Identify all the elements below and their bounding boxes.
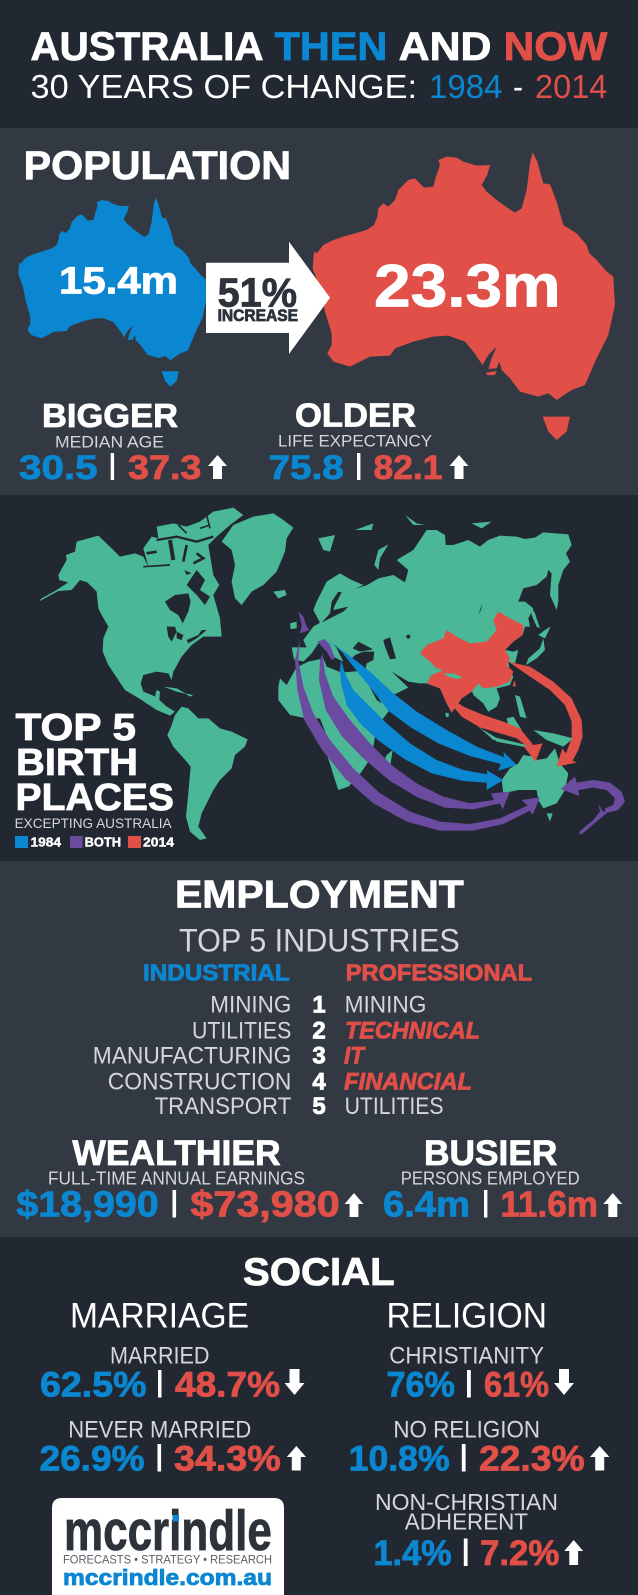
stat: bigger median age: 30.5 <box>19 449 98 487</box>
panel: social <box>40 1251 609 1595</box>
column headings: PROFESSIONAL <box>346 960 532 986</box>
column: religion: NO RELIGION <box>393 1416 540 1443</box>
stat: bigger median age: 37.3 <box>128 449 201 487</box>
column: religion: 7.2% <box>480 1534 559 1573</box>
stat: busier employed <box>383 1134 622 1224</box>
column: religion: 1.4% <box>374 1534 452 1573</box>
arrow: purple both inner <box>319 653 510 809</box>
column: religion: RELIGION <box>386 1297 547 1336</box>
stat: older life expectancy: 82.1 <box>374 449 442 487</box>
arrow: red china <box>508 662 583 767</box>
map: new zealand <box>579 803 607 835</box>
logo: mccrindle: mccrindle.com.au <box>63 1565 272 1590</box>
panel: employment <box>16 873 622 1224</box>
title: NOW <box>504 25 608 69</box>
subtitle: - <box>513 69 523 106</box>
stat: bigger median age: BIGGER <box>42 398 178 435</box>
column: marriage: NEVER MARRIED <box>68 1416 251 1443</box>
table: industries: 5 <box>312 1093 326 1120</box>
table: industries: 2 <box>312 1017 326 1044</box>
table: industries: TECHNICAL <box>345 1017 480 1044</box>
legend <box>15 836 174 850</box>
arrow: purple both outer <box>295 640 540 831</box>
heading: social: SOCIAL <box>243 1251 395 1294</box>
heading: top 5 birth places: BIRTH <box>16 742 138 784</box>
heading: top 5 birth places: EXCEPTING AUSTRALIA <box>15 815 172 831</box>
map: north america and greenland <box>40 508 293 716</box>
subtitle: 30 YEARS OF CHANGE: <box>30 69 417 106</box>
stat: bigger median age: MEDIAN AGE <box>55 432 164 452</box>
stat: wealthier earnings: $73,980 <box>190 1184 340 1224</box>
table: industries: MINING <box>210 991 291 1018</box>
column: religion: CHRISTIANITY <box>389 1342 544 1369</box>
map: south america <box>167 707 248 840</box>
panel: world map birth places <box>15 508 625 850</box>
legend: 1984 <box>30 836 61 850</box>
stat: busier employed: 6.4m <box>383 1184 470 1224</box>
title: THEN <box>275 25 387 69</box>
logo: mccrindle: mccrindle <box>64 1499 272 1563</box>
column: religion: 10.8% <box>349 1440 450 1479</box>
table: industries: 4 <box>312 1068 326 1095</box>
stat: wealthier earnings <box>16 1134 363 1224</box>
arrow: red india <box>450 697 543 762</box>
table: industries: CONSTRUCTION <box>108 1068 291 1095</box>
logo: mccrindle: FORECASTS • STRATEGY • RESEARCH <box>63 1554 272 1566</box>
legend: 2014 <box>143 836 174 850</box>
stat: older life expectancy: 75.8 <box>268 449 344 487</box>
column headings <box>143 960 532 986</box>
subtitle: 1984 <box>429 69 502 106</box>
column: religion: NON-CHRISTIAN <box>375 1489 558 1515</box>
table: industries: MINING <box>345 991 426 1018</box>
arrow: 51% increase: 51% <box>218 270 297 316</box>
subheading: top 5 industries: TOP 5 INDUSTRIES <box>179 922 460 959</box>
subtitle: 2014 <box>535 69 607 106</box>
table: industries: FINANCIAL <box>344 1068 472 1095</box>
title: AUSTRALIA <box>30 25 264 69</box>
stat: 15.4m: 15.4m <box>59 260 178 302</box>
column: religion: 22.3% <box>479 1440 585 1479</box>
map: inland seas <box>322 592 482 659</box>
table: industries: TRANSPORT <box>155 1093 292 1120</box>
column: marriage <box>40 1297 306 1479</box>
heading: population: POPULATION <box>24 144 291 188</box>
column headings: INDUSTRIAL <box>143 960 290 986</box>
arrow: blue 1984 lower <box>340 660 503 790</box>
arrow: 51% increase <box>206 242 330 354</box>
stat: older life expectancy: OLDER <box>295 398 416 435</box>
stat: bigger median age <box>19 398 227 487</box>
arrows: migration <box>295 640 625 835</box>
column: marriage: 48.7% <box>175 1366 280 1405</box>
heading: top 5 birth places <box>15 707 174 831</box>
map: red sea <box>364 677 382 703</box>
heading: top 5 birth places: TOP 5 <box>16 707 136 749</box>
arrow: blue 1984 upper <box>327 641 517 771</box>
map: africa and oceania <box>278 658 573 822</box>
legend: BOTH <box>85 836 121 850</box>
stat: wealthier earnings: FULL-TIME ANNUAL EARNINGS <box>48 1168 305 1188</box>
column: marriage: 26.9% <box>40 1440 144 1479</box>
table: industries: 3 <box>312 1042 326 1069</box>
subtitle <box>30 69 607 106</box>
map: hudson bay and great lakes <box>143 515 213 643</box>
table: industries: UTILITIES <box>345 1093 444 1120</box>
column: religion <box>349 1297 609 1573</box>
table: industries: UTILITIES <box>192 1017 291 1044</box>
map: eurasia <box>290 515 572 713</box>
column: marriage: MARRIED <box>110 1342 210 1369</box>
stat: older life expectancy <box>268 398 468 487</box>
heading: top 5 birth places: PLACES <box>16 777 174 819</box>
column: religion: 76% <box>386 1366 455 1405</box>
stat: wealthier earnings: $18,990 <box>16 1184 159 1224</box>
column: religion: ADHERENT <box>405 1508 528 1534</box>
map: Australia 2014 red <box>313 152 615 440</box>
heading: employment: EMPLOYMENT <box>175 873 464 916</box>
stat: wealthier earnings: WEALTHIER <box>72 1134 281 1173</box>
column: marriage: 62.5% <box>40 1366 146 1405</box>
title <box>30 25 608 69</box>
map: uk and italy highlighted <box>298 612 335 660</box>
column: marriage: MARRIAGE <box>70 1297 249 1336</box>
arrow: 51% increase: INCREASE <box>218 307 298 325</box>
stat: busier employed: 11.6m <box>500 1184 598 1224</box>
arrow: purple new zealand <box>561 777 625 813</box>
map: nepal <box>443 673 463 679</box>
column: marriage: 34.3% <box>174 1440 281 1479</box>
stat: busier employed: BUSIER <box>424 1134 557 1173</box>
panel: population <box>18 144 615 487</box>
stat: busier employed: PERSONS EMPLOYED <box>401 1168 580 1188</box>
map: china and india highlighted <box>420 612 523 713</box>
table: industries: 1 <box>312 991 326 1018</box>
table: industries: MANUFACTURING <box>93 1042 291 1069</box>
stat: 23.3m: 23.3m <box>374 253 561 320</box>
table: industries <box>93 991 480 1120</box>
title: AND <box>399 25 492 69</box>
stat: older life expectancy: LIFE EXPECTANCY <box>278 432 432 451</box>
table: industries: IT <box>344 1042 366 1069</box>
map: Australia 1984 blue <box>18 197 207 387</box>
logo: mccrindle <box>52 1498 284 1595</box>
column: religion: 61% <box>484 1366 549 1405</box>
